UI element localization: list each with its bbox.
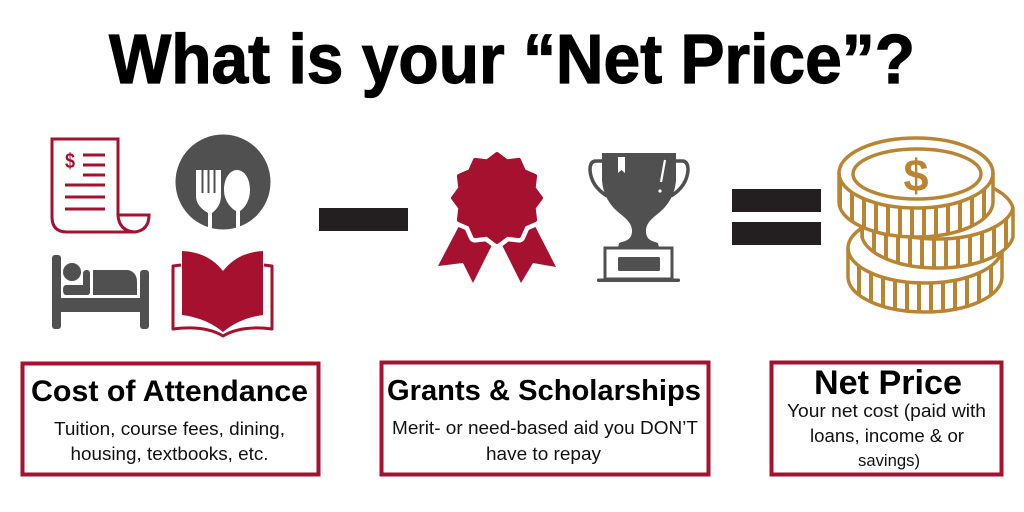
panel: cost of attendance (22, 364, 318, 474)
text: cost of attendance description (54, 419, 285, 464)
panel: net price (772, 362, 1002, 474)
text: grants description: Merit- or need-based aid you DON’T (392, 418, 698, 438)
icon: bill (52, 139, 149, 232)
text: grants description (392, 418, 698, 464)
icon: ribbon rosette (438, 154, 556, 283)
icon: trophy (590, 153, 688, 282)
text: cost of attendance description: Tuition, course fees, dining, (54, 419, 285, 439)
text: cost of attendance description: housing, textbooks, etc. (70, 444, 268, 464)
title: What is your “Net Price”? (109, 20, 915, 98)
icon: bed (52, 255, 149, 329)
text: net price description (787, 401, 986, 470)
heading: cost of attendance: Cost of Attendance (31, 375, 308, 408)
text: net price description: savings) (858, 451, 920, 470)
heading: net price: Net Price (814, 364, 962, 402)
equals sign (732, 189, 821, 245)
heading: grants and scholarships: Grants & Scholarships (387, 375, 701, 407)
panel: grants and scholarships (382, 362, 708, 474)
text: net price description: Your net cost (paid with (787, 401, 986, 421)
icon: plate with fork and spoon (176, 134, 270, 230)
icon: stack of coins (838, 138, 1015, 312)
icon: bill: $ (65, 150, 75, 173)
top coin (838, 138, 995, 237)
minus sign (319, 208, 408, 231)
top coin: $ (903, 150, 929, 201)
text: net price description: loans, income & or (810, 426, 964, 446)
middle coin (860, 177, 1015, 268)
bottom coin (846, 228, 1004, 314)
icon: open book (173, 251, 272, 336)
text: grants description: have to repay (486, 444, 601, 464)
